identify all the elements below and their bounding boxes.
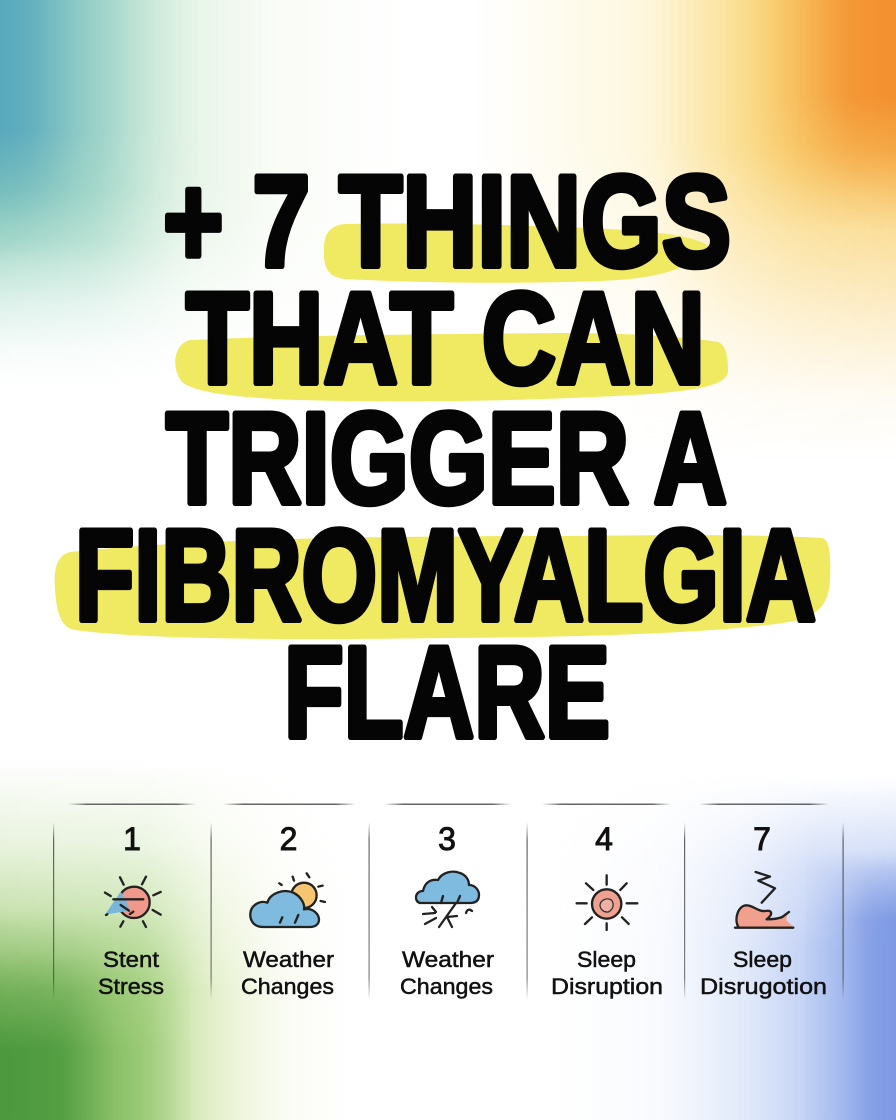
title: + 7 THINGS — [163, 148, 731, 294]
item 3: weather changes: Weather — [402, 947, 494, 972]
icon: sleeper with zigzag — [735, 872, 793, 928]
item 5: sleep disruption: Sleep — [733, 947, 792, 972]
title: THAT CAN — [186, 265, 705, 411]
item 4: sleep disruption: Sleep — [577, 947, 636, 972]
item 4: sleep disruption — [551, 821, 663, 999]
item 2: weather changes — [241, 821, 334, 999]
title — [75, 148, 816, 765]
item 1: stent stress: 1 — [123, 821, 141, 857]
item 3: weather changes: Changes — [400, 974, 493, 999]
item 2: weather changes: Changes — [241, 974, 334, 999]
highlight: fibromyalgia — [55, 535, 830, 639]
highlight: things — [324, 223, 711, 283]
icon: pink sun — [577, 875, 637, 930]
column dividers — [53, 804, 844, 1000]
item 3: weather changes: 3 — [438, 821, 456, 857]
highlight: that can — [175, 333, 728, 401]
item 3: weather changes — [400, 821, 494, 999]
item 1: stent stress: Stress — [98, 974, 164, 999]
item 5: sleep disruption: Disrugotion — [700, 974, 827, 999]
item 4: sleep disruption: Disruption — [551, 974, 663, 999]
icon: storm cloud — [416, 872, 479, 927]
title: TRIGGER A — [166, 385, 727, 531]
item 1: stent stress — [98, 821, 164, 999]
item 4: sleep disruption: 4 — [595, 821, 613, 857]
icon: stent sun — [105, 877, 161, 927]
icon: cloud and sun — [250, 873, 325, 927]
item 5: sleep disruption: 7 — [753, 821, 771, 857]
item 1: stent stress: Stent — [103, 947, 159, 972]
title: FLARE — [284, 619, 610, 765]
item 2: weather changes: Weather — [243, 947, 334, 972]
item 5: sleep disruption — [700, 821, 827, 999]
item 2: weather changes: 2 — [280, 821, 297, 857]
